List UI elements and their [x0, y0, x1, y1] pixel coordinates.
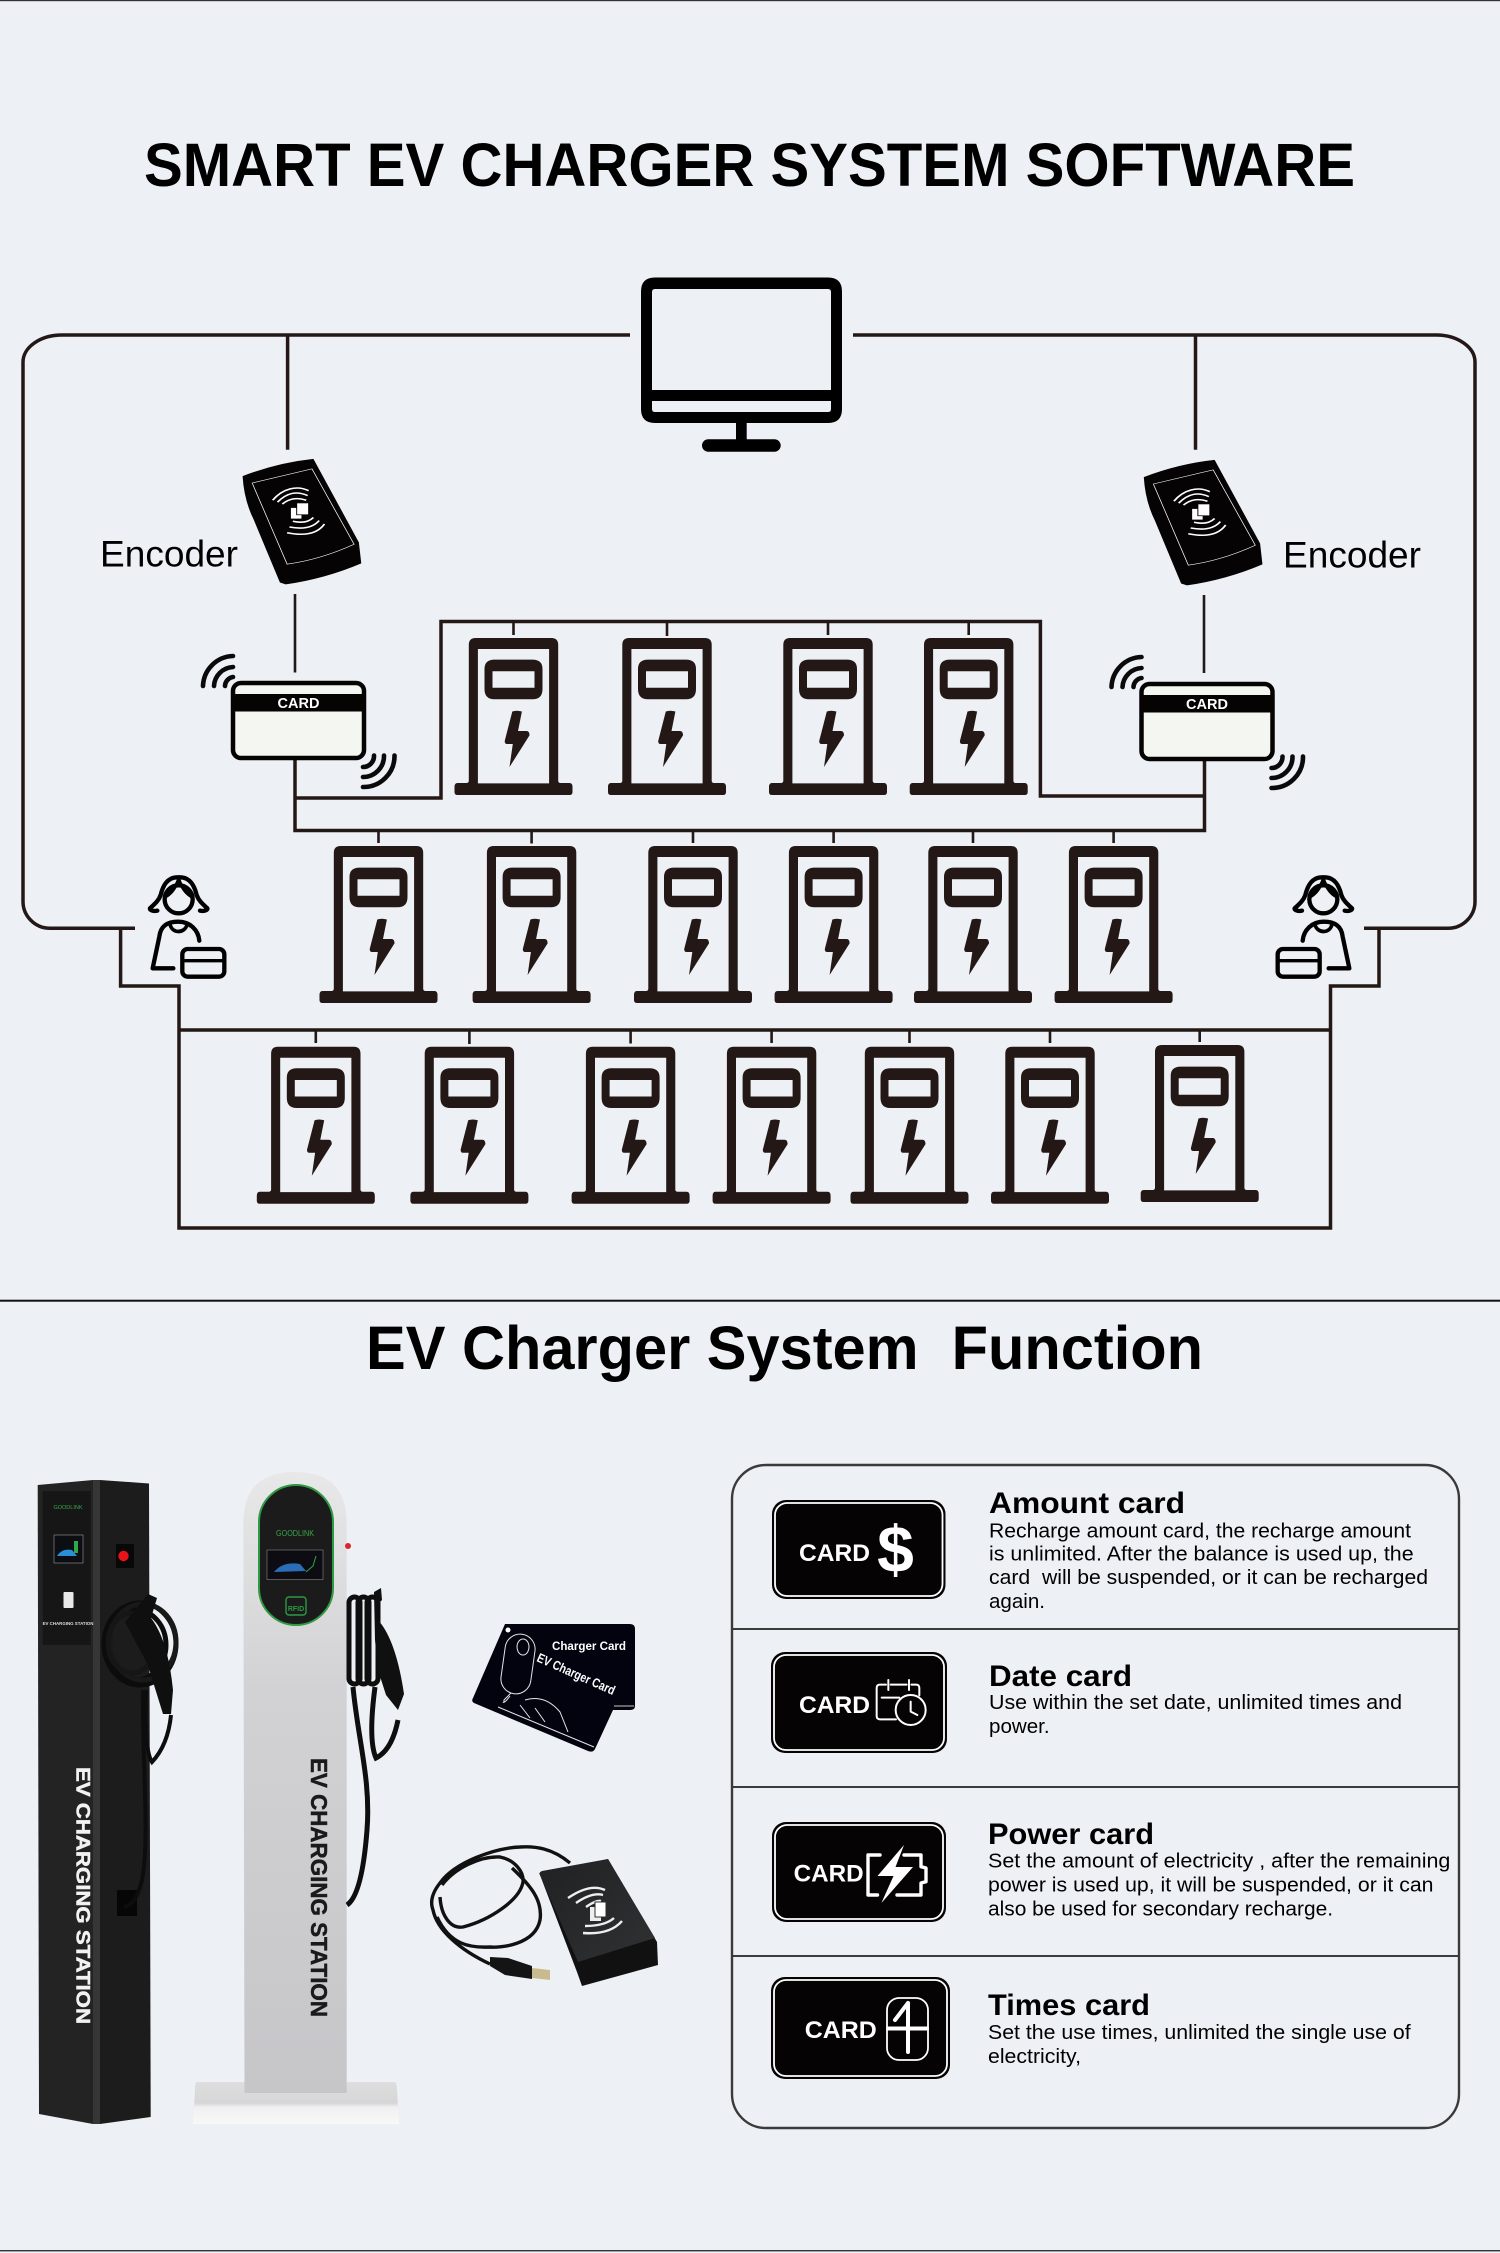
icon: left RFID card — [203, 656, 395, 787]
section heading: EV Charger System Function — [366, 1314, 1203, 1382]
badge: times card: CARD — [805, 2017, 877, 2044]
product: EV charger cards — [472, 1624, 635, 1752]
text: power card: Power card — [988, 1818, 1154, 1851]
text: times card: Set the use times, unlimited the single use of — [988, 2021, 1411, 2044]
text: date card: Use within the set date, unlimited times and — [989, 1691, 1402, 1714]
product: silver charging station: EV CHARGING STATION — [306, 1758, 332, 2017]
amount card row — [772, 1487, 1428, 1613]
product: EV charger cards: Charger Card — [552, 1639, 626, 1653]
icon: left encoder — [243, 459, 361, 584]
text: date card — [989, 1660, 1402, 1738]
text: power card: Set the amount of electricity , after the remaining — [988, 1850, 1450, 1873]
text: amount card: again. — [989, 1590, 1045, 1613]
badge: amount card: CARD — [799, 1540, 870, 1567]
chargers: top row — [454, 638, 1028, 795]
badge: power card: CARD — [794, 1861, 864, 1888]
text: amount card: card will be suspended, or it can be recharged — [989, 1566, 1428, 1589]
badge: amount card — [772, 1500, 946, 1599]
text: date card: Date card — [989, 1660, 1132, 1693]
product: silver charging station: RFID — [288, 1606, 304, 1613]
title: SMART EV CHARGER SYSTEM SOFTWARE — [144, 131, 1355, 199]
icon: right RFID card — [1112, 657, 1303, 788]
product: black charging station: EV CHARGING STATION — [72, 1767, 92, 2024]
power card row — [772, 1818, 1450, 1922]
text: amount card: is unlimited. After the balance is used up, the — [989, 1543, 1414, 1566]
icon: right RFID card: CARD — [1186, 697, 1228, 713]
product: silver charging station — [193, 1472, 404, 2124]
badge: power card — [772, 1822, 946, 1922]
text: times card: Times card — [988, 1989, 1150, 2022]
badge: date card — [771, 1652, 947, 1753]
text: amount card — [989, 1487, 1428, 1613]
text: power card: also be used for secondary recharge. — [988, 1898, 1333, 1921]
icon: right encoder — [1144, 460, 1262, 585]
product: black charging station: GOODLINK — [53, 1505, 83, 1511]
text: date card: power. — [989, 1715, 1050, 1738]
badge: times card — [771, 1977, 950, 2079]
badge: amount card: $ — [877, 1512, 914, 1586]
text: amount card: Recharge amount card, the recharge amount — [989, 1520, 1411, 1543]
text: power card — [988, 1818, 1450, 1921]
product: black charging station — [38, 1480, 176, 2124]
text: power card: power is used up, it will be suspended, or it can — [988, 1874, 1434, 1897]
label: right encoder: Encoder — [1283, 534, 1421, 576]
icon: left operator — [150, 877, 224, 977]
icon: right operator — [1278, 877, 1352, 977]
label: left encoder: Encoder — [100, 534, 238, 574]
badge: date card: CARD — [799, 1692, 870, 1719]
text: amount card: Amount card — [989, 1487, 1185, 1520]
text: times card — [988, 1989, 1411, 2068]
times card row — [771, 1977, 1411, 2079]
product: silver charging station: GOODLINK — [276, 1529, 315, 1538]
chargers: bottom row — [257, 1045, 1259, 1204]
product: EV charger cards: EV Charger Card — [535, 1650, 618, 1698]
product: USB card reader — [432, 1847, 658, 1986]
icon: computer monitor — [641, 278, 842, 452]
chargers: middle row — [320, 846, 1173, 1003]
icon: left RFID card: CARD — [278, 696, 319, 712]
text: times card: electricity, — [988, 2045, 1081, 2068]
network wiring — [23, 335, 1475, 1228]
product: black charging station: EV CHARGING STATION — [43, 1621, 93, 1626]
date card row — [771, 1652, 1402, 1753]
panel: card types — [732, 1465, 1459, 2128]
